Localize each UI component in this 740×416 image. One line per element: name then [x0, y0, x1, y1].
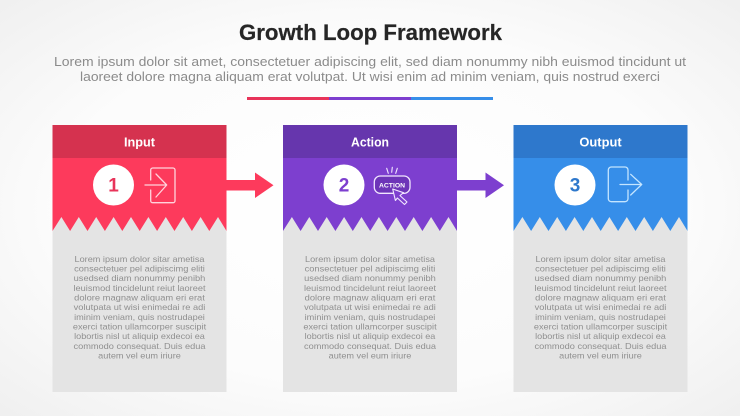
output coloured zigzag block — [514, 125, 688, 231]
subtitle text — [54, 55, 687, 84]
action description text: Lorem ipsum dolor sitar ametisa — [305, 255, 435, 264]
output body background — [514, 125, 688, 392]
action description text: leuismod tincidelunt reiut laoreet — [304, 284, 437, 293]
panel: action — [283, 125, 457, 392]
action description text: autem vel eum iriure — [329, 352, 412, 360]
action description text: usedsed diam nonummy penibh — [304, 274, 436, 283]
input description text: exerci tation ullamcorper suscipit — [73, 322, 207, 332]
panel: input — [52, 125, 226, 392]
icon: action button with cursor — [374, 167, 410, 204]
subtitle text: Lorem ipsum dolor sit amet, consectetuer adipiscing elit, sed diam nonummy nibh euismod tincidunt ut — [54, 55, 687, 69]
subtitle text: laoreet dolore magna aliquam erat volutpat. Ut wisi enim ad minim veniam, quis nostrud exerci — [80, 70, 660, 84]
number 2 badge — [324, 164, 364, 206]
output description text: exerci tation ullamcorper suscipit — [534, 322, 668, 332]
action description text: volutpata ut wisi enimedai re adi — [304, 303, 436, 312]
output description text: lobortis nisl ut aliquip exdecoi ea — [535, 332, 666, 341]
output heading: Output — [579, 136, 622, 150]
input description text: iminim veniam, quis nostrudapei — [74, 313, 205, 322]
output description text: consectetuer pel adipiscimg eliti — [535, 264, 666, 274]
input description text: leuismod tincidelunt reiut laoreet — [74, 284, 206, 293]
output description text: iminim veniam, quis nostrudapei — [535, 313, 666, 322]
input coloured zigzag block — [52, 125, 226, 231]
output description text: leuismod tincidelunt reiut laoreet — [534, 284, 667, 293]
input description text: usedsed diam nonummy penibh — [74, 274, 206, 283]
action description text: lobortis nisl ut aliquip exdecoi ea — [305, 332, 436, 341]
action description text: consectetuer pel adipiscimg eliti — [305, 264, 436, 274]
output description text: volutpata ut wisi enimedai re adi — [535, 303, 667, 312]
input description text: dolore magnaw aliquam eri erat — [74, 294, 206, 302]
action description text: iminim veniam, quis nostrudapei — [305, 313, 436, 322]
icon: enter — [145, 168, 175, 203]
action description text — [303, 255, 437, 360]
action description text: commodo consequat. Duis edua — [304, 342, 436, 351]
panel: output — [514, 125, 688, 392]
output heading band — [514, 125, 688, 158]
input description text: consectetuer pel adipiscimg eliti — [74, 264, 205, 274]
number 1 badge — [93, 164, 134, 206]
input body background — [52, 125, 226, 392]
action body background — [283, 125, 457, 392]
action heading band — [283, 125, 457, 158]
action description text: dolore magnaw aliquam eri erat — [305, 294, 436, 302]
action heading: Action — [351, 136, 389, 150]
action description text: exerci tation ullamcorper suscipit — [303, 322, 437, 332]
output description text: Lorem ipsum dolor sitar ametisa — [536, 255, 666, 264]
input description text — [73, 255, 207, 360]
output description text: usedsed diam nonummy penibh — [535, 274, 667, 283]
input heading: Input — [124, 136, 156, 150]
output description text: commodo consequat. Duis edua — [534, 342, 667, 351]
input heading band — [52, 125, 226, 158]
output description text: autem vel eum iriure — [559, 352, 642, 360]
icon: action button with cursor: ACTION — [379, 182, 406, 189]
icon: exit — [608, 167, 642, 202]
number 3 badge — [554, 164, 596, 206]
action coloured zigzag block — [283, 125, 457, 231]
arrow: action to output — [456, 172, 504, 198]
title: Growth Loop Framework — [239, 20, 502, 45]
input description text: commodo consequat. Duis edua — [74, 342, 206, 351]
input description text: autem vel eum iriure — [98, 352, 181, 360]
input description text: Lorem ipsum dolor sitar ametisa — [74, 255, 205, 264]
arrow: input to action — [226, 172, 274, 198]
number 2 badge: 2 — [339, 176, 349, 196]
tricolour divider — [247, 97, 493, 100]
input description text: lobortis nisl ut aliquip exdecoi ea — [74, 332, 205, 341]
output description text: dolore magnaw aliquam eri erat — [535, 294, 667, 302]
number 1 badge: 1 — [108, 176, 119, 196]
number 3 badge: 3 — [570, 176, 580, 196]
input description text: volutpata ut wisi enimedai re adi — [74, 303, 206, 312]
output description text — [534, 255, 668, 360]
